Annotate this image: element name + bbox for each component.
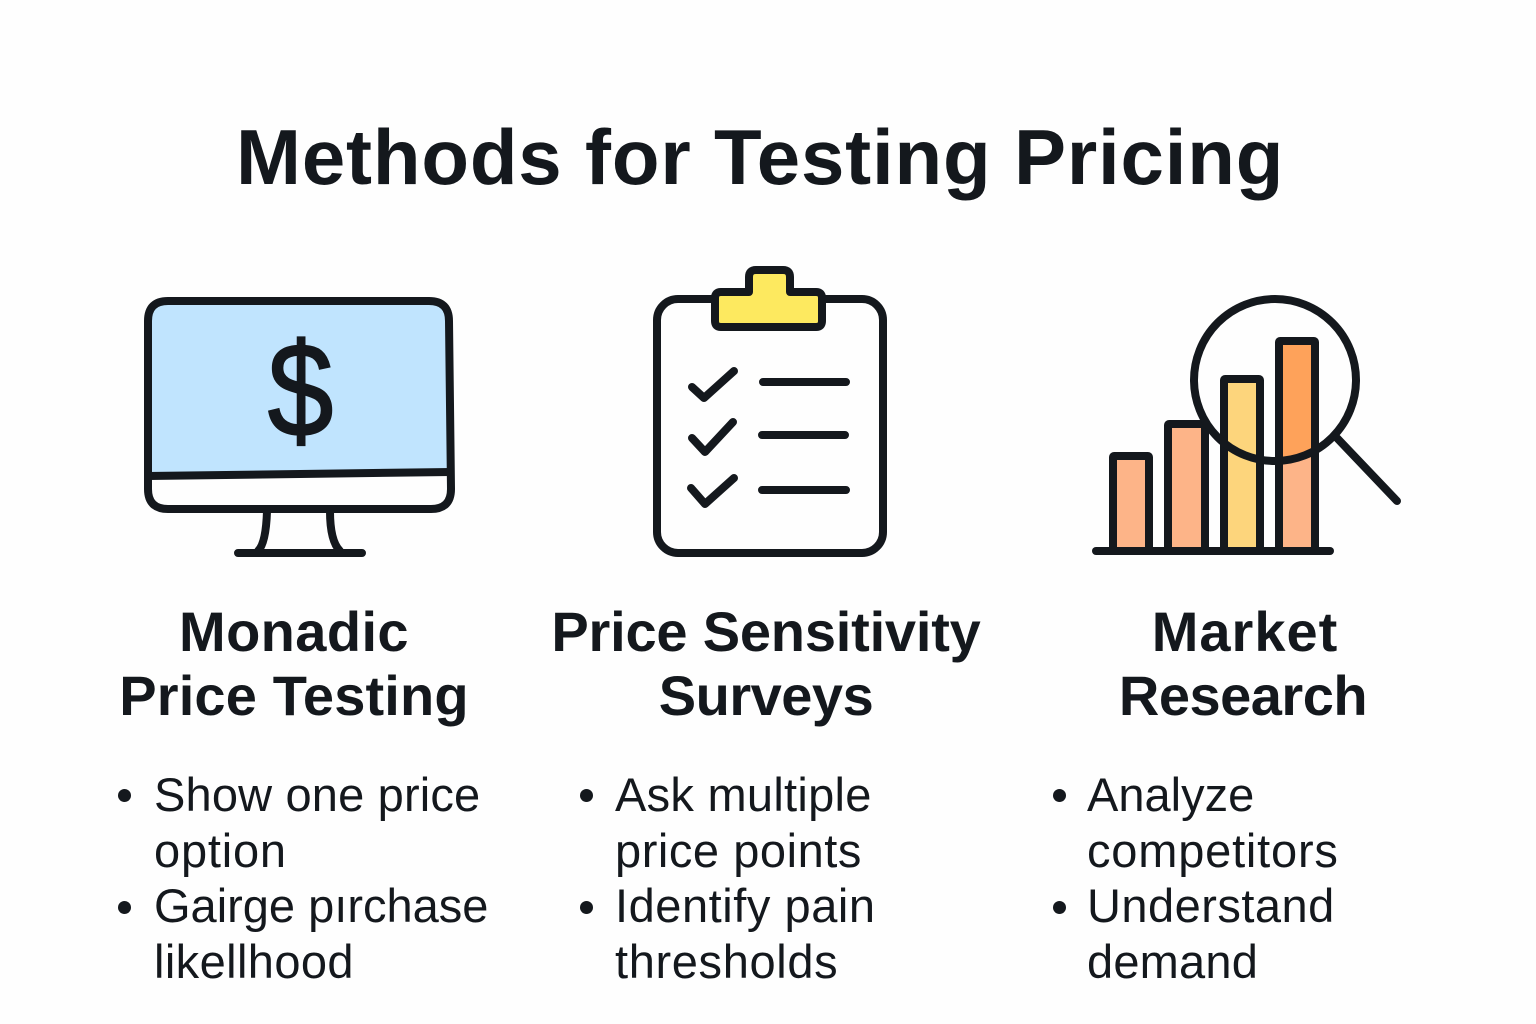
text block: market research bullets: demand <box>1087 935 1258 988</box>
text block: survey bullets: price points <box>615 824 862 877</box>
icon: monitor with dollar sign: $ <box>268 315 333 465</box>
text block: market research bullets: competitors <box>1087 824 1339 877</box>
text block: survey bullets: Identify pain <box>615 879 876 932</box>
heading: Price Sensitivity Surveys: Price Sensitivity <box>551 600 981 663</box>
heading: Market Research <box>1119 600 1367 727</box>
icon: bar chart with magnifying glass <box>1092 295 1401 555</box>
text block: survey bullets: thresholds <box>615 935 838 988</box>
heading: Price Sensitivity Surveys <box>551 600 981 727</box>
text block: monadic bullets: likellhood <box>154 935 354 988</box>
text block: monadic bullets <box>118 768 488 988</box>
text block: market research bullets: Analyze <box>1087 768 1254 821</box>
text block: market research bullets <box>1053 768 1339 988</box>
text block: market research bullets: Understand <box>1087 879 1335 932</box>
icon: monitor with dollar sign <box>144 297 455 557</box>
text block: monadic bullets: Gairge pırchase <box>154 879 488 932</box>
heading: Market Research: Market <box>1152 600 1338 663</box>
text block: survey bullets <box>580 768 876 988</box>
text block: survey bullets: Ask multiple <box>615 768 872 821</box>
heading: Monadic Price Testing: Price Testing <box>119 664 469 727</box>
heading: Market Research: Research <box>1119 664 1367 727</box>
heading: Price Sensitivity Surveys: Surveys <box>659 664 873 727</box>
text block: monadic bullets: Show one price <box>154 768 480 821</box>
icon: clipboard with checklist <box>653 266 887 557</box>
heading: Monadic Price Testing <box>119 600 469 727</box>
title: Methods for Testing Pricing <box>236 113 1284 201</box>
heading: Monadic Price Testing: Monadic <box>179 600 409 663</box>
text block: monadic bullets: option <box>154 824 287 877</box>
